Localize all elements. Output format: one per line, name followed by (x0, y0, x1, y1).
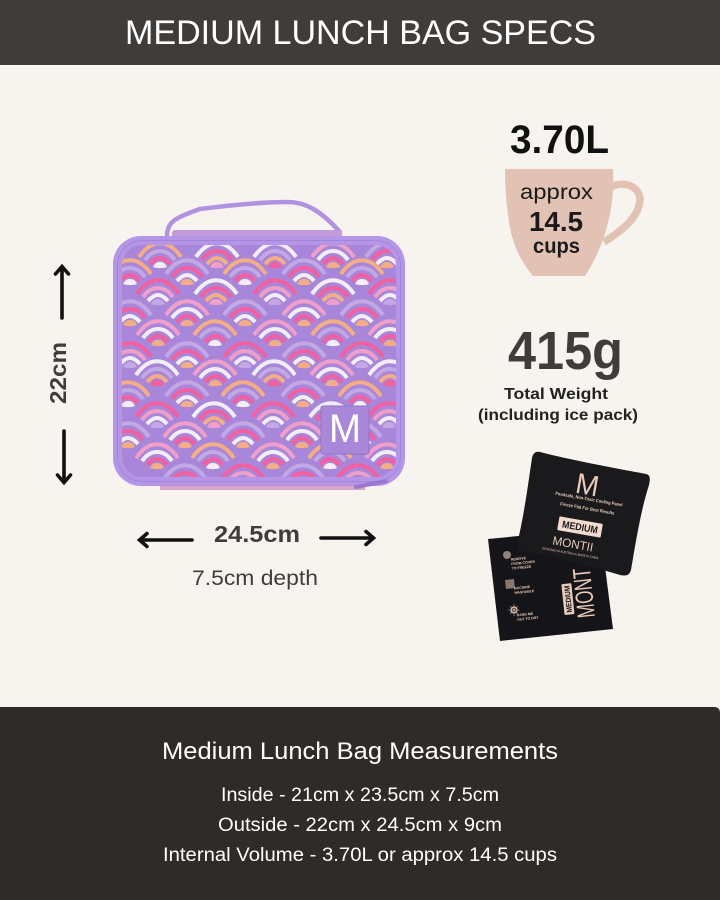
brand label patch (321, 406, 369, 454)
ice pack sleeve: REMOVE (511, 556, 527, 562)
ice pack front panel: Foodsafe, Non-Toxic Cooling Panel (555, 491, 623, 508)
measurements panel (0, 707, 720, 900)
ice pack front panel: DESIGNED IN AUSTRALIA | MADE IN CHINA (542, 546, 599, 560)
ice pack front panel: M (573, 468, 601, 503)
width dimension (140, 521, 374, 547)
weight figure: 415g (508, 321, 623, 381)
height dimension: 22cm (45, 342, 71, 404)
ice pack sleeve: TO FREEZE (512, 565, 532, 571)
ice pack sleeve (488, 528, 613, 641)
ice pack sleeve: MACHINE (514, 585, 531, 591)
cup icon with capacity text: cups (533, 235, 580, 258)
header band with title (0, 0, 720, 65)
weight caption: (including ice pack) (478, 407, 638, 424)
cup icon with capacity text (505, 169, 640, 276)
height dimension (45, 266, 71, 482)
ice pack front panel (518, 452, 650, 575)
cup icon with capacity text: 14.5 (529, 206, 583, 237)
ice pack sleeve: MONT (568, 567, 601, 619)
ice pack sleeve: MEDIUM (562, 585, 574, 613)
rainbow pattern (122, 245, 396, 477)
lunch bag photo illustration (113, 200, 405, 490)
inside measurement: Inside - 21cm x 23.5cm x 7.5cm (221, 785, 499, 806)
ice pack sleeve: HANG ME (516, 612, 534, 617)
panel heading: Medium Lunch Bag Measurements (162, 738, 558, 765)
cup icon with capacity text: approx (520, 181, 594, 204)
width dimension: 24.5cm (214, 521, 300, 547)
ice pack sleeve: FROM COVER (511, 560, 536, 566)
ice pack sleeve: OUT TO DRY (517, 616, 539, 622)
weight caption: Total Weight (504, 386, 609, 403)
ice pack front panel: MEDIUM (561, 519, 599, 537)
depth label: 7.5cm depth (192, 567, 318, 590)
outside measurement: Outside - 22cm x 24.5cm x 9cm (218, 815, 502, 836)
ice pack front panel: MONTII (552, 534, 594, 554)
weight caption (478, 386, 638, 424)
volume figure: 3.70L (510, 118, 609, 162)
internal volume: Internal Volume - 3.70L or approx 14.5 cups (163, 845, 557, 866)
ice pack sleeve: WASHABLE (514, 589, 535, 595)
header band with title: MEDIUM LUNCH BAG SPECS (125, 14, 596, 52)
ice pack front panel: Freeze Flat For Best Results (560, 501, 615, 516)
brand label patch: M (329, 407, 361, 451)
